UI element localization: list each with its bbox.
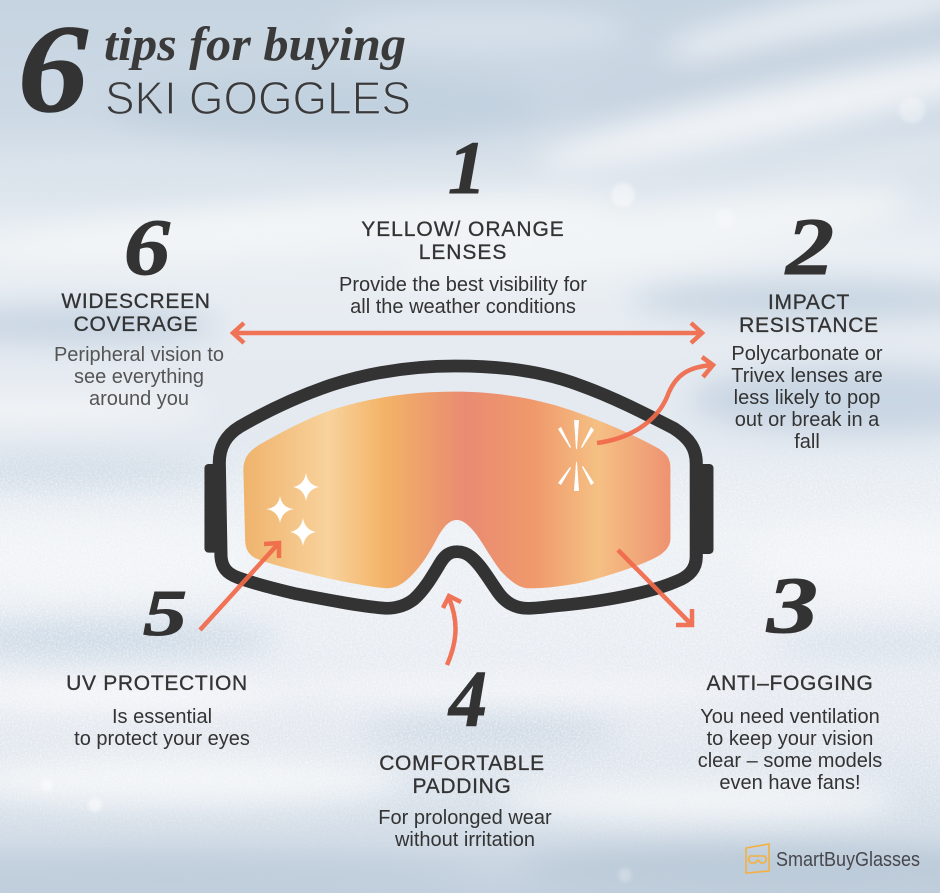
tip 3: anti-fogging (698, 672, 882, 794)
title script line: tips for buying (104, 18, 406, 71)
tip 2: impact resistance: Polycarbonate or (731, 343, 883, 365)
tip 4: comfortable padding: COMFORTABLE (379, 752, 545, 775)
number 5: 5 (143, 577, 187, 650)
tip 6: widescreen coverage: Peripheral vision to (54, 344, 224, 366)
number 1: 1 (448, 127, 486, 210)
tip 1: yellow/orange lenses: Provide the best visibility for (339, 274, 587, 296)
tip 5: uv protection: Is essential (112, 706, 212, 728)
tip 3: anti-fogging: You need ventilation (700, 706, 880, 728)
tip 3: anti-fogging: ANTI–FOGGING (706, 672, 874, 695)
tip 2: impact resistance (731, 291, 883, 453)
tip 5: uv protection (66, 672, 250, 750)
arrow: anti-fogging (618, 550, 692, 625)
tip 3: anti-fogging: even have fans! (719, 772, 861, 794)
tip 6: widescreen coverage (54, 290, 224, 410)
tip 6: widescreen coverage: see everything (74, 366, 204, 388)
tip 2: impact resistance: fall (794, 431, 820, 453)
tip 5: uv protection: to protect your eyes (74, 728, 250, 750)
tip 2: impact resistance: RESISTANCE (739, 314, 879, 337)
number 2: 2 (785, 201, 834, 292)
tip 6: widescreen coverage: WIDESCREEN (61, 290, 211, 313)
tip 2: impact resistance: IMPACT (768, 291, 850, 314)
tip 6: widescreen coverage: around you (89, 388, 189, 410)
tip 1: yellow/orange lenses: YELLOW/ ORANGE (361, 218, 565, 241)
goggle frame (219, 366, 696, 608)
logo wordmark: SmartBuyGlasses (776, 848, 920, 871)
tip 6: widescreen coverage: COVERAGE (74, 313, 198, 336)
tip 4: comfortable padding (378, 752, 552, 851)
tip 1: yellow/orange lenses (339, 218, 587, 318)
number 4: 4 (447, 656, 487, 744)
tip 3: anti-fogging: to keep your vision (707, 728, 873, 750)
goggle lens (243, 392, 670, 588)
tip 2: impact resistance: out or break in a (735, 409, 879, 431)
title numeral 6: 6 (18, 0, 88, 139)
number 6: 6 (124, 204, 170, 292)
tip 2: impact resistance: less likely to pop (734, 387, 880, 409)
tip 1: yellow/orange lenses: all the weather conditions (350, 296, 576, 318)
tip 5: uv protection: UV PROTECTION (66, 672, 248, 695)
tip 3: anti-fogging: clear – some models (698, 750, 882, 772)
icon: sparkles (266, 473, 319, 546)
arrow: padding (443, 596, 461, 665)
tip 4: comfortable padding: PADDING (412, 775, 512, 798)
tip 4: comfortable padding: without irritation (395, 829, 535, 851)
tip 4: comfortable padding: For prolonged wear (378, 807, 552, 829)
number 3: 3 (766, 562, 818, 650)
arrow: widescreen double arrow (233, 323, 702, 343)
goggle straps (204, 464, 713, 554)
icon: impact burst (558, 420, 594, 491)
arrow: uv (200, 543, 279, 630)
tip 2: impact resistance: Trivex lenses are (731, 365, 883, 387)
logo icon (746, 844, 769, 873)
arrow: impact (597, 357, 713, 443)
tip 1: yellow/orange lenses: LENSES (419, 241, 507, 264)
title main line: SKI GOGGLES (105, 72, 411, 124)
